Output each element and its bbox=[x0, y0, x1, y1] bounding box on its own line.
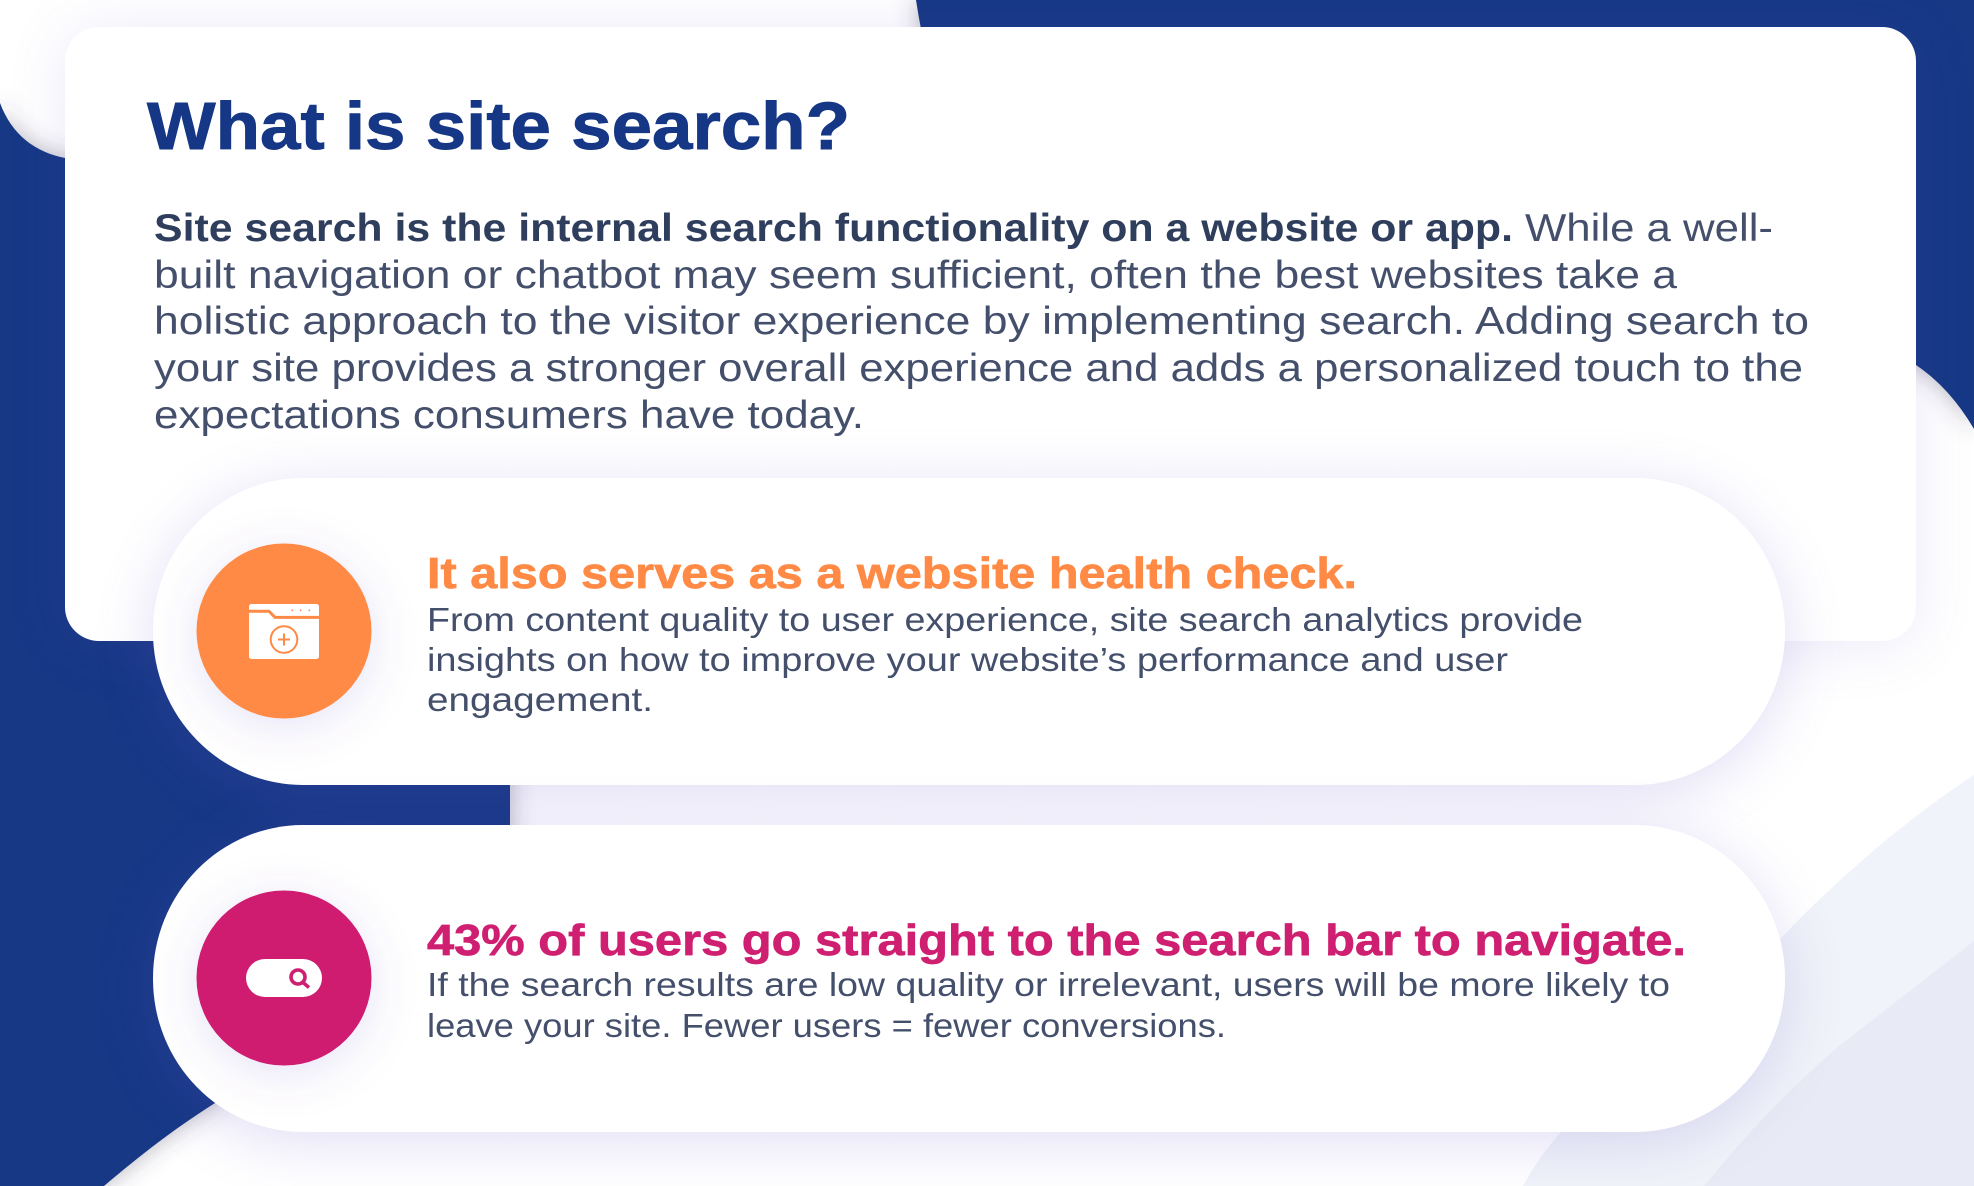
darker bottom-right wave bbox=[1704, 941, 1974, 1186]
text: statistic description bbox=[427, 966, 1670, 1044]
intro paragraph: Site search is the internal search functionality on a website or app. bbox=[154, 207, 1513, 250]
intro paragraph: expectations consumers have today. bbox=[154, 394, 864, 437]
panel: website health check bbox=[153, 478, 1785, 785]
intro paragraph: built navigation or chatbot may seem sufficient, often the best websites take a bbox=[154, 254, 1677, 297]
intro paragraph: your site provides a stronger overall experience and adds a personalized touch to the bbox=[154, 347, 1803, 390]
pale bottom-right wave bbox=[1523, 775, 1974, 1186]
heading: 43% statistic: 43% of users go straight to the search bar to navigate. bbox=[427, 916, 1686, 965]
panel: intro card bbox=[65, 27, 1916, 641]
text: statistic description: If the search results are low quality or irrelevant, users will be more likely to bbox=[427, 966, 1670, 1003]
intro paragraph bbox=[154, 207, 1809, 437]
navy left shape bbox=[0, 103, 510, 1186]
intro paragraph: holistic approach to the visitor experience by implementing search. Adding search to bbox=[154, 300, 1809, 343]
text: health check description: insights on how to improve your website’s performance and user bbox=[427, 641, 1508, 678]
title: What is site search? bbox=[147, 89, 850, 164]
text: statistic description: leave your site. Fewer users = fewer conversions. bbox=[427, 1007, 1226, 1044]
icon: search bar bbox=[196, 890, 372, 1066]
navy top-right shape bbox=[916, 0, 1974, 429]
text: health check description: From content quality to user experience, site search analytics provide bbox=[427, 601, 1583, 638]
text: health check description: engagement. bbox=[427, 681, 653, 718]
icon: folder with plus bbox=[196, 544, 372, 718]
panel: search bar statistic bbox=[153, 825, 1785, 1132]
intro paragraph: While a well- bbox=[1525, 207, 1773, 250]
text: health check description bbox=[427, 601, 1583, 718]
heading: health check: It also serves as a website health check. bbox=[427, 549, 1357, 598]
